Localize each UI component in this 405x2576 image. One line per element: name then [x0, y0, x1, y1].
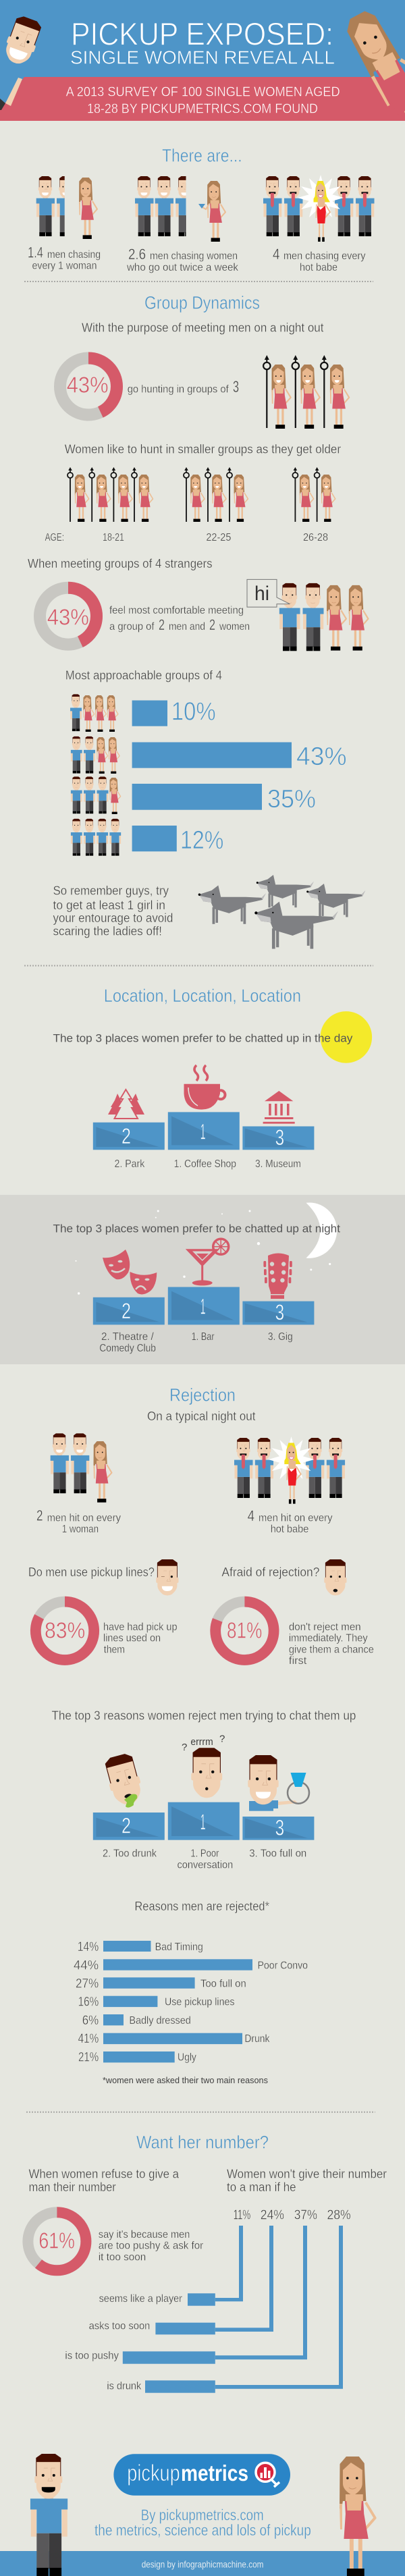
podium labels: night: 2. Theatre /: [101, 1331, 154, 1343]
age labels: AGE:: [45, 532, 64, 543]
caption: 1.4 men: men chasing: [47, 249, 101, 261]
donut caption: pickup lines: have had pick up: [103, 1621, 178, 1633]
row: 2 men 2 women, 43 percent: 43%: [296, 743, 347, 771]
heading: There are...: [162, 145, 242, 165]
podium: day: 1: [200, 1120, 206, 1144]
figures: 2.6 men per woman with drink: [135, 176, 225, 242]
text: smaller groups: Women like to hunt in smaller groups as they get older: [65, 443, 341, 456]
left intro: When women refuse to give a: [28, 2168, 180, 2181]
podium: night: [93, 1287, 314, 1324]
podium: day: 2: [122, 1124, 131, 1148]
donut caption: rejection: immediately. They: [289, 1633, 368, 1644]
icon: man leaning in from the left: [0, 14, 44, 110]
tagline: the metrics, science and lols of pickup: [94, 2521, 311, 2539]
heading: Location, Location, Location: [104, 986, 301, 1006]
donut caption: it too soon: [99, 2251, 146, 2263]
podium labels: night: 1. Bar: [192, 1331, 215, 1343]
caption: 4 men: men chasing every: [284, 250, 366, 262]
caption: 4 men: hot babe: [271, 1524, 308, 1535]
donut caption: feel most comfortable meeting: [109, 605, 244, 616]
advice text: to get at least 1 girl in: [53, 898, 165, 912]
bar chart: reasons: 27%: [76, 1977, 99, 1991]
donut caption: [99, 2229, 204, 2263]
donut caption: 2: [209, 616, 215, 633]
row: 4 men, 12 percent: [71, 819, 223, 856]
figures: 3 women with spears: [263, 355, 349, 429]
podium: night: 2: [122, 1299, 131, 1323]
caption: 1.4 men: every 1 woman: [32, 261, 97, 272]
icon: theatre masks: [103, 1250, 157, 1294]
connector chart: number refusal reasons: is drunk: [107, 2380, 142, 2392]
podium labels: day: 3. Museum: [255, 1158, 301, 1170]
right intro: [227, 2168, 387, 2194]
caption: 2 men: 1 woman: [62, 1524, 99, 1535]
bar chart: reasons: 44%: [74, 1958, 99, 1973]
tagline: By pickupmetrics.com: [141, 2506, 264, 2523]
caption: 1.4 men: [28, 244, 101, 272]
podium labels: reasons: 2. Too drunk: [103, 1848, 157, 1860]
figures: age 18-21 four women: [68, 467, 153, 522]
connector chart: number refusal reasons: 28%: [327, 2207, 351, 2222]
donut caption: men and: [169, 621, 205, 633]
figures: age 26-28 two women: [292, 467, 335, 522]
bar chart: reasons: Poor Convo: [258, 1960, 308, 1971]
figures: 1.4 men per woman: [36, 176, 97, 239]
question: pickup lines: Do men use pickup lines?: [28, 1565, 155, 1579]
bar chart: reasons: Too full on: [200, 1978, 246, 1990]
row: 1 man 3 women, 10 percent: [70, 694, 216, 732]
donut: 83 percent: [36, 1602, 94, 1660]
bar chart: reasons: 14%: [78, 1940, 99, 1954]
icon: woman standing: [340, 2457, 375, 2576]
panel: footer: [0, 2454, 405, 2576]
podium: reasons: [93, 1802, 314, 1840]
podium labels: night: Comedy Club: [99, 1343, 156, 1354]
panel: rejection: [28, 1385, 374, 2085]
panel: location daytime: [53, 986, 372, 1170]
donut: 43 percent comfortable with 2 men and 2 women: 43%: [47, 604, 89, 629]
donut caption: [128, 378, 239, 396]
donut caption: rejection: first: [289, 1655, 307, 1667]
donut caption: go hunting in groups of: [128, 384, 229, 396]
connector chart: number refusal reasons: asks too soon: [89, 2321, 150, 2332]
advice text: scaring the ladies off!: [53, 924, 162, 938]
figures: mixed group with speech bubble: [247, 579, 369, 651]
right intro: Women won't give their number: [227, 2168, 387, 2181]
figures: age 22-25 three women: [184, 467, 248, 522]
survey description: A 2013 SURVEY OF 100 SINGLE WOMEN AGED: [66, 84, 340, 99]
donut: 81 percent: 81%: [227, 1618, 262, 1643]
podium labels: day: 2. Park: [115, 1158, 145, 1170]
subtitle: SINGLE WOMEN REVEAL ALL: [70, 47, 335, 68]
heading: Group Dynamics: [144, 292, 260, 313]
bar chart: reasons: Drunk: [244, 2033, 270, 2045]
caption: 2 men: [36, 1507, 121, 1535]
donut caption: 2: [159, 616, 165, 633]
heading: Want her number?: [136, 2132, 269, 2152]
donut: 43 percent hunt in groups of 3: [60, 358, 117, 414]
row: 4 men, 12 percent: 12%: [180, 826, 223, 855]
donut: 43 percent hunt in groups of 3: 43%: [67, 373, 109, 398]
bar chart: reasons: Badly dressed: [129, 2015, 191, 2027]
logo: pickupmetrics: metrics: [181, 2461, 248, 2486]
panel: group dynamics: [28, 292, 369, 949]
podium labels: reasons: conversation: [177, 1860, 233, 1871]
connector chart: number refusal reasons: 11%: [234, 2207, 250, 2222]
panel: there are: [28, 145, 374, 273]
podium labels: reasons: 1. Poor: [190, 1848, 219, 1860]
donut caption: a group of: [109, 621, 155, 633]
logo: pickupmetrics: [113, 2454, 290, 2496]
icon: museum: [263, 1091, 295, 1124]
row: 3 men 1 woman, 35 percent: 35%: [267, 785, 316, 813]
donut caption: pickup lines: [103, 1621, 178, 1655]
thought text: errrm: [182, 1734, 225, 1753]
podium: night: 3: [275, 1300, 284, 1324]
icon: guitar headstock: [263, 1253, 292, 1299]
donut: 81 percent: [215, 1602, 274, 1660]
survey description: 18-28 BY PICKUPMETRICS.COM FOUND: [87, 101, 318, 116]
stars: [76, 1210, 331, 1295]
caption: 2.6 men: [126, 246, 239, 273]
podium labels: night: [99, 1331, 293, 1354]
podium: day: [93, 1112, 314, 1150]
donut caption: pickup lines: them: [104, 1644, 125, 1655]
age labels: [45, 532, 328, 543]
donut caption: are too pushy & ask for: [99, 2240, 204, 2252]
icon: scared head: [324, 1559, 346, 1595]
speech bubble: hi: [247, 579, 290, 607]
icon: cocktail: [186, 1239, 229, 1285]
panel: want her number: [28, 2132, 387, 2393]
donut caption: rejection: [289, 1621, 374, 1667]
caption: 4 men: [273, 246, 366, 273]
advice text: So remember guys, try: [53, 884, 169, 897]
survey description: [66, 84, 340, 116]
connector chart: number refusal reasons: [65, 2207, 351, 2393]
thought text: errrm: ?: [182, 1742, 187, 1753]
connector chart: number refusal reasons: is too pushy: [65, 2350, 119, 2361]
donut caption: pickup lines: lines used on: [103, 1633, 161, 1644]
podium: reasons: 3: [275, 1815, 284, 1840]
icon: head proposing with ring: [248, 1755, 309, 1811]
panel: header: [0, 0, 405, 121]
podium: reasons: 2: [122, 1814, 131, 1838]
donut caption: 3: [233, 378, 239, 396]
caption: 4 men: hot babe: [300, 262, 338, 273]
icon: confused head: [191, 1748, 222, 1798]
row: 1 man 3 women, 10 percent: 10%: [171, 698, 216, 726]
row: 3 men 1 woman, 35 percent: [71, 776, 316, 814]
donut caption: [109, 605, 250, 633]
podium labels: reasons: [103, 1848, 306, 1871]
podium labels: day: [115, 1158, 301, 1170]
donut caption: women: [219, 621, 250, 633]
icon: drunk head: [103, 1752, 145, 1808]
icon: coffee cup: [184, 1065, 225, 1110]
caption: 4 men: 4: [273, 246, 279, 263]
chart title: Most approachable groups of 4: [65, 668, 222, 682]
figures: 2 men 1 woman: [51, 1433, 111, 1503]
icon: man standing: [30, 2454, 68, 2576]
advice text: [53, 884, 173, 938]
caption: 2.6 men: 2.6: [128, 246, 146, 263]
heading: Rejection: [169, 1385, 236, 1405]
logo: pickupmetrics: pickup: [127, 2461, 180, 2486]
connector chart: number refusal reasons: 24%: [261, 2207, 284, 2222]
caption: 4 men: [248, 1507, 332, 1535]
donut: 61 percent: [28, 2212, 86, 2270]
age labels: 18-21: [103, 532, 124, 543]
icon: pack of wolves: [198, 875, 366, 949]
bar chart: reasons: 6%: [82, 2014, 99, 2028]
age labels: 22-25: [206, 532, 231, 543]
panel: location night: [0, 1195, 405, 1364]
podium: day: 3: [275, 1125, 284, 1150]
advice text: your entourage to avoid: [53, 911, 173, 925]
red subtitle band: [0, 77, 405, 121]
bar chart: reasons: Ugly: [178, 2051, 196, 2063]
text: night places: The top 3 places women prefer to be chatted up at night: [53, 1222, 340, 1235]
bar chart: reasons: [74, 1940, 308, 2064]
bar chart: reasons: Use pickup lines: [165, 1997, 235, 2008]
figures: 4 men chasing a hot babe: [263, 175, 374, 242]
design credit: design by infographicmachine.com: [142, 2558, 263, 2569]
icon: woman leaning in from the right: [347, 11, 405, 113]
text: top 3 reasons: The top 3 reasons women reject men trying to chat them up: [51, 1709, 356, 1722]
bar chart: reasons: 41%: [78, 2032, 99, 2046]
question: afraid of rejection: Afraid of rejection?: [221, 1565, 319, 1579]
intro line: With the purpose of meeting men on a night out: [82, 321, 324, 335]
caption: 1.4 men: 1.4: [28, 244, 43, 261]
podium labels: day: 1. Coffee Shop: [174, 1158, 236, 1170]
icon: crescent moon: [306, 1202, 337, 1258]
caption: 2 men: men hit on every: [47, 1512, 121, 1524]
tagline: [94, 2506, 311, 2539]
donut: 83 percent: 83%: [45, 1618, 85, 1643]
donut: 43 percent comfortable with 2 men and 2 women: [40, 588, 97, 645]
right intro: to a man if he: [227, 2180, 296, 2194]
podium labels: reasons: 3. Too full on: [249, 1848, 306, 1860]
age labels: 26-28: [303, 532, 328, 543]
intro line: On a typical night out: [147, 1410, 255, 1423]
bar chart: reasons: 16%: [78, 1995, 99, 2010]
podium: reasons: 1: [200, 1810, 206, 1834]
caption: 2 men: 2: [36, 1507, 43, 1524]
figures: 4 men hot babe: [234, 1437, 345, 1504]
left intro: [28, 2168, 180, 2194]
connector chart: number refusal reasons: 37%: [294, 2207, 317, 2222]
connector chart: number refusal reasons: seems like a player: [99, 2293, 183, 2305]
donut caption: say it's because men: [99, 2229, 190, 2240]
thought text: errrm: errrm: [190, 1736, 213, 1748]
caption: 2.6 men: who go out twice a week: [126, 262, 239, 273]
thought text: errrm: ?: [219, 1734, 225, 1745]
row: 2 men 2 women, 43 percent: [71, 736, 347, 774]
podium labels: night: 3. Gig: [268, 1331, 293, 1343]
icon: smiling winking head: [156, 1559, 178, 1595]
left intro: man their number: [28, 2180, 116, 2194]
title: PICKUP EXPOSED:: [71, 16, 333, 52]
speech bubble: hi: hi: [254, 583, 269, 605]
bar chart: reasons: Bad Timing: [155, 1941, 203, 1953]
podium: night: 1: [200, 1295, 206, 1319]
donut caption: rejection: give them a chance: [289, 1644, 374, 1655]
chart title: reasons men are rejected: Reasons men are rejected*: [134, 1900, 269, 1913]
icon: park trees: [108, 1090, 144, 1119]
text: day places: The top 3 places women prefer to be chatted up in the day: [53, 1031, 353, 1044]
caption: 4 men: men hit on every: [259, 1512, 332, 1524]
donut caption: rejection: don't reject men: [289, 1621, 361, 1633]
caption: 4 men: 4: [248, 1507, 254, 1524]
footnote: *women were asked their two main reasons: [103, 2075, 268, 2085]
text: meeting strangers: When meeting groups of 4 strangers: [28, 557, 213, 570]
bar chart: reasons: 21%: [78, 2050, 99, 2064]
chart: most approachable groups of 4: [65, 668, 347, 856]
caption: 2.6 men: men chasing women: [150, 250, 238, 262]
icon: sun: [320, 1011, 372, 1063]
donut: 61 percent: 61%: [38, 2228, 75, 2253]
